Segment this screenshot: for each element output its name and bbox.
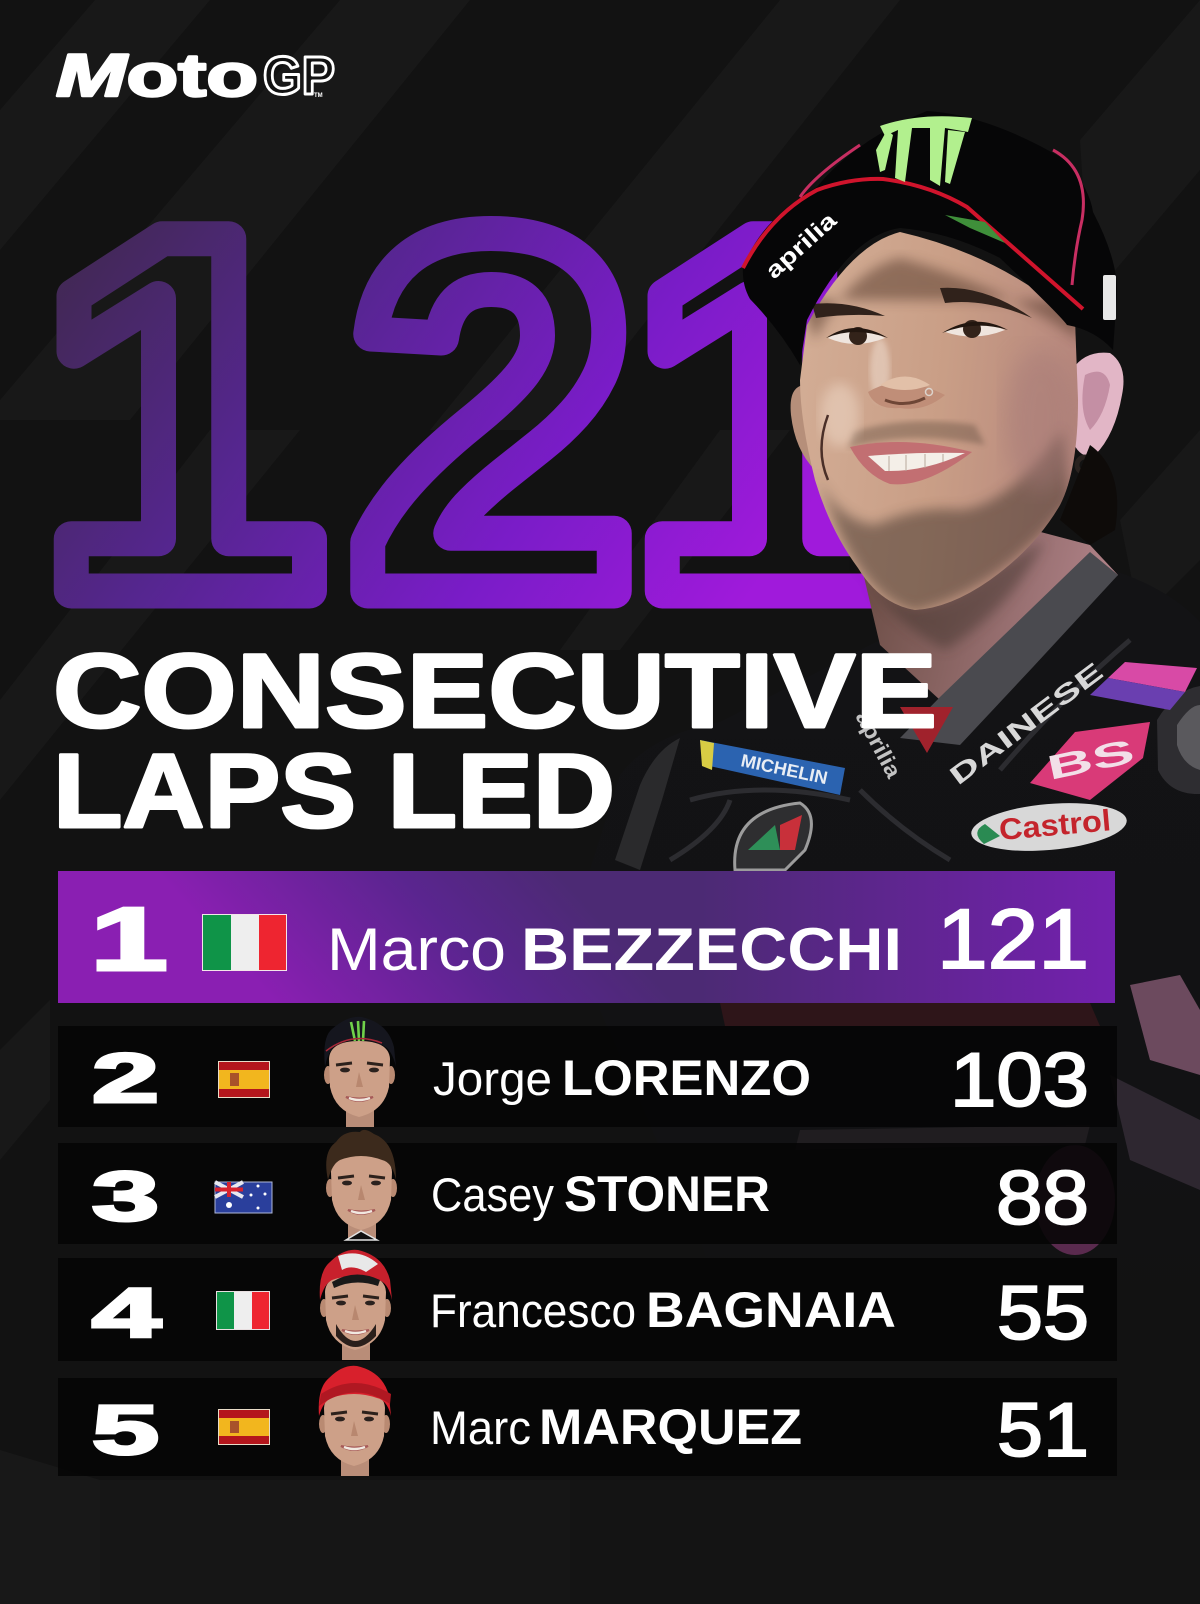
name: Casey bbox=[431, 1168, 554, 1221]
name bbox=[431, 1166, 770, 1222]
suit badge: Agip bbox=[735, 803, 811, 870]
row 2: Jorge Lorenzo bbox=[58, 1017, 1117, 1127]
portrait: Bagnaia bbox=[320, 1250, 392, 1360]
value: 88 bbox=[996, 1156, 1089, 1241]
neck bbox=[860, 530, 1118, 700]
racing suit bbox=[590, 572, 1200, 1430]
logo: MotoGP: M oto bbox=[56, 42, 258, 109]
suit badge: Castrol bbox=[969, 797, 1129, 857]
name: MARQUEZ bbox=[539, 1399, 802, 1455]
flag: Italy bbox=[202, 914, 287, 971]
name: BEZZECCHI bbox=[521, 916, 902, 983]
eyes bbox=[826, 320, 1008, 345]
cap brim sponsor: aprilia bbox=[760, 207, 841, 284]
flag: Spain bbox=[218, 1409, 270, 1445]
cap bbox=[743, 111, 1117, 365]
suit sponsor: aprilia chest: aprilia bbox=[851, 707, 907, 783]
row 1: Marco Bezzecchi bbox=[58, 871, 1115, 1003]
left ear bbox=[791, 385, 815, 470]
name: STONER bbox=[564, 1166, 770, 1222]
value: 51 bbox=[997, 1388, 1089, 1473]
flag: Italy bbox=[216, 1291, 270, 1330]
rank 3: 3 bbox=[92, 1157, 159, 1235]
monster logo bbox=[876, 116, 972, 186]
value: 55 bbox=[997, 1271, 1089, 1356]
suit badge: Castrol: Castrol bbox=[998, 804, 1112, 847]
suit badge: pink stripes bbox=[1090, 662, 1197, 710]
rank 1: 1 bbox=[90, 890, 168, 990]
name: LORENZO bbox=[562, 1050, 811, 1106]
eyebrows bbox=[812, 288, 1032, 318]
name bbox=[430, 1282, 896, 1338]
ear bbox=[1060, 353, 1124, 545]
rank 4: 4 bbox=[92, 1274, 161, 1352]
row 4: Francesco Bagnaia bbox=[58, 1250, 1117, 1361]
mouth bbox=[850, 442, 972, 484]
flag: Australia bbox=[215, 1182, 272, 1213]
name bbox=[430, 1399, 802, 1455]
logo: MotoGP bbox=[56, 42, 335, 109]
logo: MotoGP: TM bbox=[314, 93, 323, 99]
suit badge: red Dainese mark bbox=[900, 707, 953, 753]
suit badge: Michelin bbox=[700, 740, 845, 795]
value: 121 bbox=[937, 892, 1089, 986]
suit badge: Michelin: MICHELIN bbox=[739, 750, 829, 788]
suit sponsor: Dainese: DAINESE bbox=[944, 656, 1109, 791]
headline: consecutive laps led: LAPS LED bbox=[53, 733, 615, 850]
rider photo: Marco Bezzecchi bbox=[590, 111, 1200, 1430]
name bbox=[327, 916, 902, 983]
rank 2: 2 bbox=[92, 1039, 159, 1117]
big number: 121: 121 bbox=[39, 127, 915, 700]
name: Marco bbox=[327, 916, 506, 983]
name: BAGNAIA bbox=[646, 1282, 896, 1338]
name: Jorge bbox=[433, 1052, 552, 1105]
rank 5: 5 bbox=[92, 1391, 159, 1469]
name: Francesco bbox=[430, 1284, 636, 1337]
row 3: Casey Stoner bbox=[58, 1130, 1117, 1244]
portrait: Stoner bbox=[326, 1130, 397, 1240]
row 5: Marc Marquez bbox=[58, 1366, 1117, 1476]
portrait: Lorenzo bbox=[324, 1017, 396, 1127]
portrait: Marquez bbox=[319, 1366, 391, 1476]
logo: MotoGP: GP bbox=[263, 46, 335, 106]
flag: Spain bbox=[218, 1061, 270, 1098]
name bbox=[433, 1050, 811, 1106]
value: 103 bbox=[950, 1038, 1089, 1123]
face bbox=[800, 232, 1080, 612]
nose bbox=[868, 383, 945, 409]
neck stubble bbox=[860, 540, 1045, 650]
headline: consecutive laps led bbox=[53, 633, 937, 850]
suit badge: pink sponsor bbox=[1030, 722, 1150, 800]
suit badge: pink sponsor: BS bbox=[1044, 732, 1138, 788]
name: Marc bbox=[430, 1401, 531, 1454]
headline: consecutive laps led: CONSECUTIVE bbox=[53, 633, 937, 750]
